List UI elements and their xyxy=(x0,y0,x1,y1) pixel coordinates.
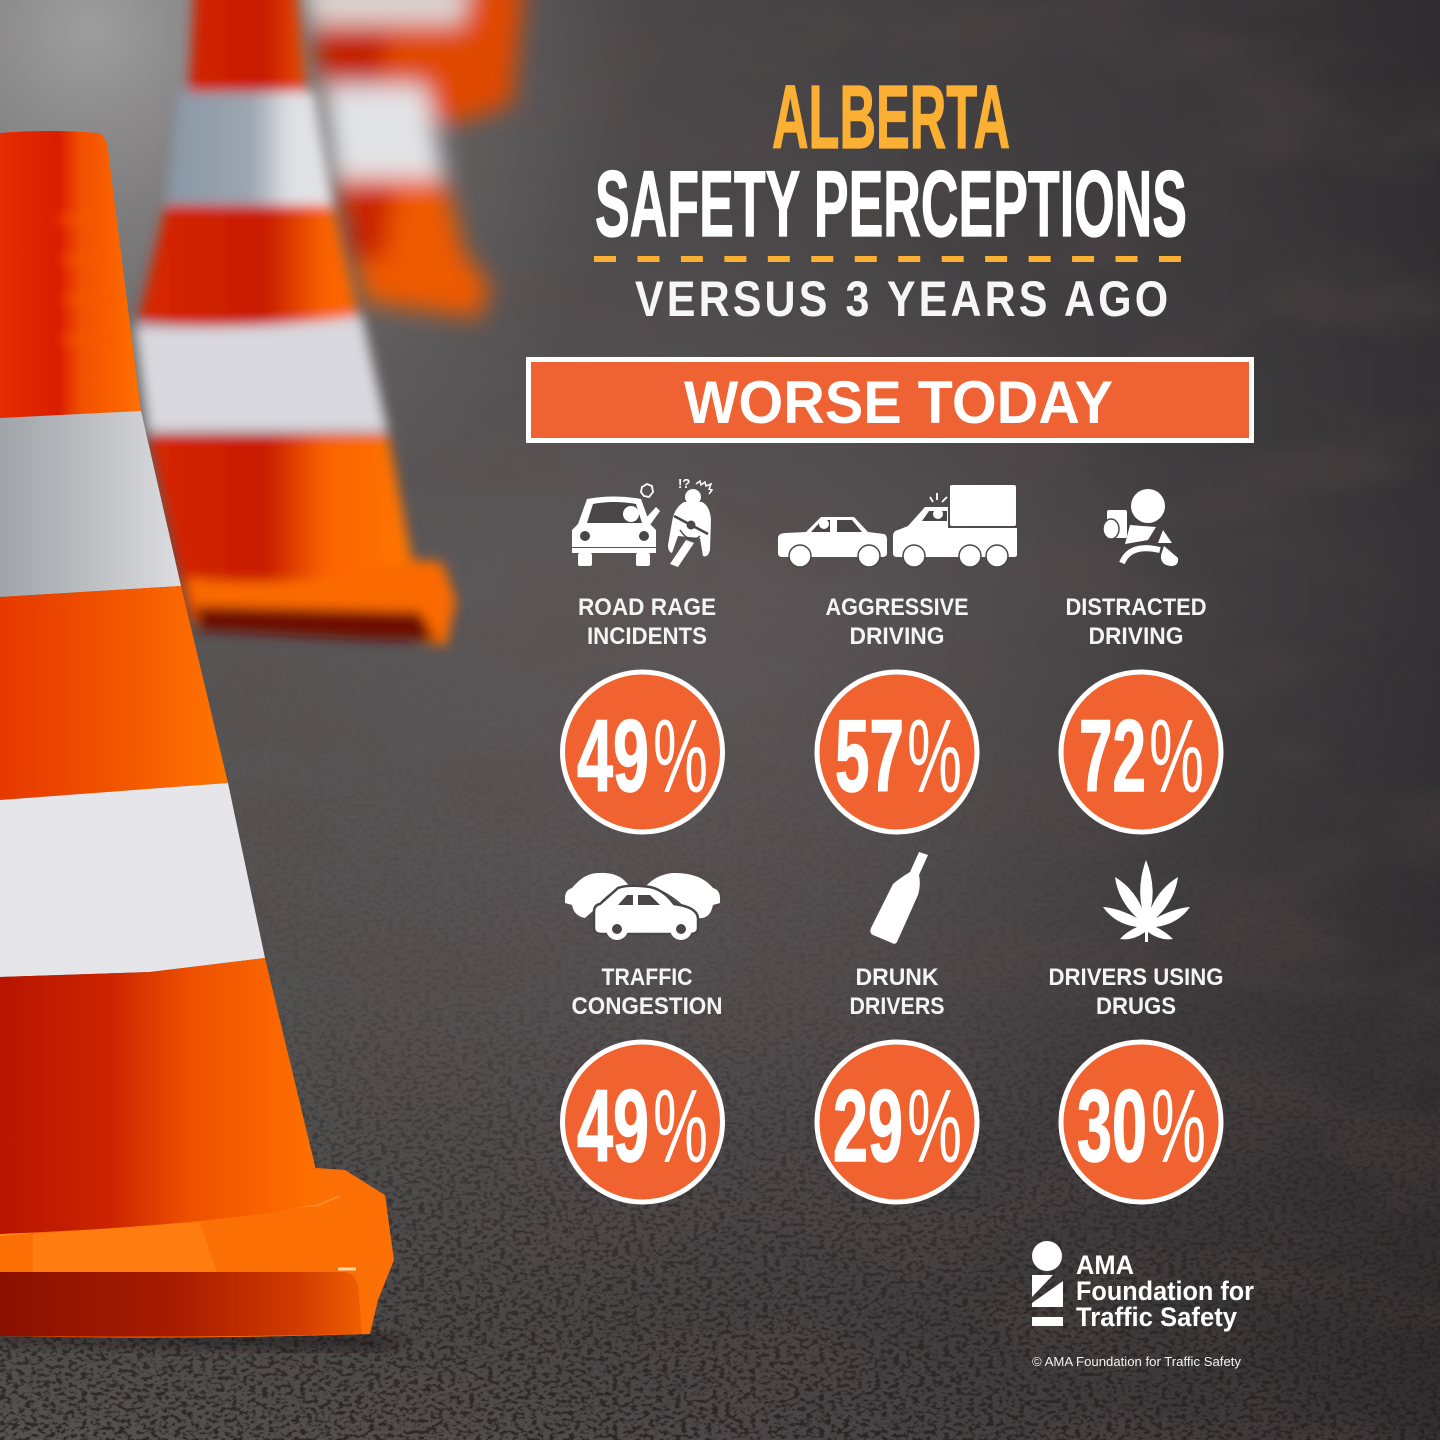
stat circle 49% xyxy=(562,672,722,832)
cone base xyxy=(0,1168,394,1338)
copyright: © AMA Foundation for Traffic Safety xyxy=(1032,1355,1242,1369)
label: DRIVERS xyxy=(850,993,944,1020)
column: drunk drivers xyxy=(817,852,977,1202)
column: distracted driving xyxy=(1061,489,1221,832)
stat circle 29%: % xyxy=(907,1069,962,1185)
icon: bottle xyxy=(870,852,928,944)
logo wordmark: Foundation for xyxy=(1076,1276,1254,1306)
label: TRAFFIC xyxy=(602,964,692,991)
stat circle 72%: 72 xyxy=(1079,699,1146,813)
cone top section xyxy=(0,131,141,420)
icon: distracted driver with phone xyxy=(1103,489,1178,566)
label: CONGESTION xyxy=(572,993,722,1020)
logo: AMA Foundation for Traffic Safety xyxy=(1032,1241,1254,1332)
cone white band lower xyxy=(0,783,265,977)
stat circle 49%: 49 xyxy=(577,699,649,813)
middle traffic cone xyxy=(135,0,456,646)
stat circle 29%: 29 xyxy=(833,1069,903,1183)
title xyxy=(594,68,1187,327)
stat circle 30%: % xyxy=(1151,1069,1206,1185)
stat circle 30%: 30 xyxy=(1077,1069,1147,1183)
column: road rage incidents xyxy=(562,476,722,832)
stat circle 30% xyxy=(1061,1042,1221,1202)
stat circle 49%: % xyxy=(653,699,708,815)
label: DRIVING xyxy=(1088,623,1184,650)
label: DRIVING xyxy=(850,623,944,650)
label: DISTRACTED xyxy=(1066,594,1206,621)
stat circle 72%: % xyxy=(1149,699,1204,815)
banner: worse today xyxy=(528,360,1252,440)
icon: cannabis leaf xyxy=(1103,860,1190,942)
column: aggressive driving xyxy=(778,485,1017,832)
cone reflective band upper xyxy=(0,411,181,597)
icon: road rage car and motorcycle xyxy=(572,476,712,567)
icon: road rage car and motorcycle: !? xyxy=(678,476,690,491)
stat circle 49%: 49 xyxy=(577,1069,649,1183)
label: AGGRESSIVE xyxy=(826,594,968,621)
label: DRIVERS USING xyxy=(1048,964,1224,991)
heading: Alberta: ALBERTA xyxy=(772,68,1010,168)
dashed road line xyxy=(594,256,1182,262)
far traffic cone xyxy=(303,0,525,318)
stat circle 57%: 57 xyxy=(835,699,904,813)
logo mark xyxy=(1032,1241,1063,1326)
stat circle 57% xyxy=(817,672,977,832)
label: ROAD RAGE xyxy=(578,594,716,621)
stat circle 49% xyxy=(562,1042,722,1202)
cone lower section xyxy=(0,958,317,1234)
logo wordmark: Traffic Safety xyxy=(1076,1302,1237,1332)
stat circle 29% xyxy=(817,1042,977,1202)
stat circle 49%: % xyxy=(653,1069,708,1185)
banner: worse today: WORSE TODAY xyxy=(684,369,1113,436)
subtitle: VERSUS 3 YEARS AGO xyxy=(635,271,1168,327)
label: DRUNK xyxy=(856,964,939,991)
icon: aggressive car and truck xyxy=(778,485,1017,567)
cone ridges xyxy=(58,215,114,343)
front traffic cone xyxy=(0,131,410,1350)
label: DRUGS xyxy=(1096,993,1176,1020)
icon: congested cars xyxy=(565,873,720,940)
column: traffic congestion xyxy=(562,873,722,1202)
stat circle 57%: % xyxy=(907,699,962,815)
label: INCIDENTS xyxy=(587,623,707,650)
cone middle section xyxy=(0,586,228,800)
logo wordmark: AMA xyxy=(1076,1250,1134,1280)
cone ground shadow xyxy=(0,1334,410,1350)
column: drivers using drugs xyxy=(1048,860,1224,1202)
stat circle 72% xyxy=(1061,672,1221,832)
